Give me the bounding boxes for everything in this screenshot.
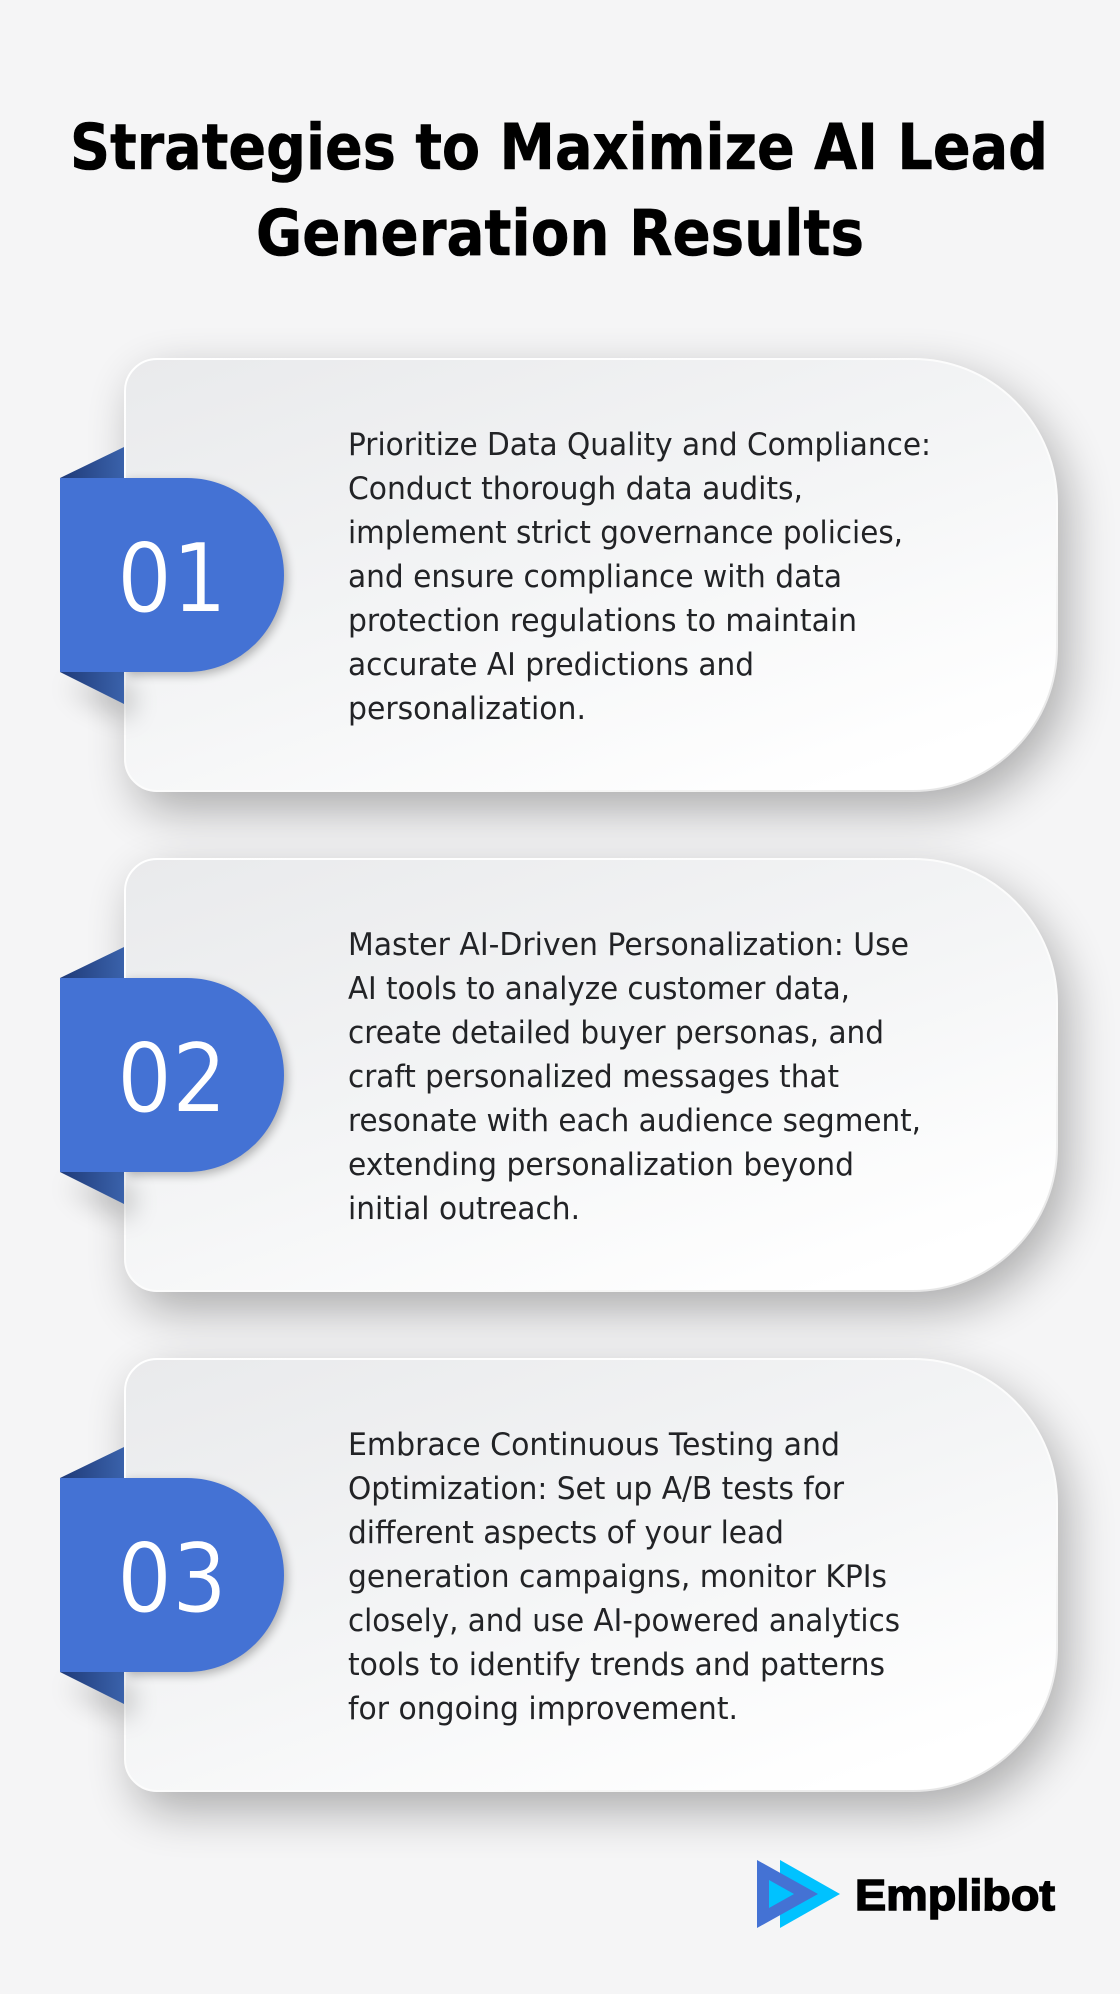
text: step 01: and ensure compliance with data [348, 559, 842, 595]
number badge 02 [60, 978, 284, 1172]
text: step 02: Master AI-Driven Personalization: Use [348, 927, 909, 963]
text: step 02: craft personalized messages that [348, 1059, 839, 1095]
text: step 01: protection regulations to maintain [348, 603, 857, 639]
title: Generation Results [256, 197, 864, 270]
panel: step 01 [60, 359, 1067, 810]
card: step 02 [125, 859, 1057, 1291]
text: step 01 [348, 427, 931, 727]
text: step 03: for ongoing improvement. [348, 1691, 738, 1727]
text: step 03: different aspects of your lead [348, 1515, 784, 1551]
ribbon fold top [60, 447, 124, 478]
number 03: 03 [117, 1524, 227, 1634]
ribbon fold top [60, 1447, 124, 1478]
card: step 01 [125, 359, 1057, 791]
wordmark: Emplibot [855, 1871, 1055, 1920]
text: step 02: resonate with each audience segment, [348, 1103, 921, 1139]
ribbon fold bottom [60, 672, 124, 704]
text: step 03: Embrace Continuous Testing and [348, 1427, 840, 1463]
text: step 02: AI tools to analyze customer data, [348, 971, 850, 1007]
number 02: 02 [117, 1024, 227, 1134]
text: step 02: create detailed buyer personas, and [348, 1015, 884, 1051]
card: step 03 [125, 1359, 1057, 1791]
text: step 03 [348, 1427, 900, 1727]
ribbon fold bottom [60, 1672, 124, 1704]
text: step 03: tools to identify trends and patterns [348, 1647, 885, 1683]
ribbon fold top [60, 947, 124, 978]
text: step 01: personalization. [348, 691, 586, 727]
number badge 03 [60, 1478, 284, 1672]
title [70, 111, 1048, 270]
text: step 01: Prioritize Data Quality and Compliance: [348, 427, 931, 463]
number badge 01 [60, 478, 284, 672]
text: step 03: Optimization: Set up A/B tests for [348, 1471, 844, 1507]
panel: step 03 [60, 1359, 1067, 1810]
text: step 02: initial outreach. [348, 1191, 580, 1227]
text: step 02: extending personalization beyond [348, 1147, 854, 1183]
text: step 01: implement strict governance policies, [348, 515, 903, 551]
ribbon fold bottom [60, 1172, 124, 1204]
text: step 03: closely, and use AI-powered analytics [348, 1603, 900, 1639]
text: step 01: accurate AI predictions and [348, 647, 754, 683]
number 01: 01 [117, 524, 227, 634]
text: step 02 [348, 927, 921, 1227]
text: step 01: Conduct thorough data audits, [348, 471, 803, 507]
icon: play triangles [757, 1860, 840, 1928]
panel: step 02 [60, 859, 1067, 1310]
text: step 03: generation campaigns, monitor KPIs [348, 1559, 887, 1595]
logo: Emplibot [757, 1860, 1055, 1928]
